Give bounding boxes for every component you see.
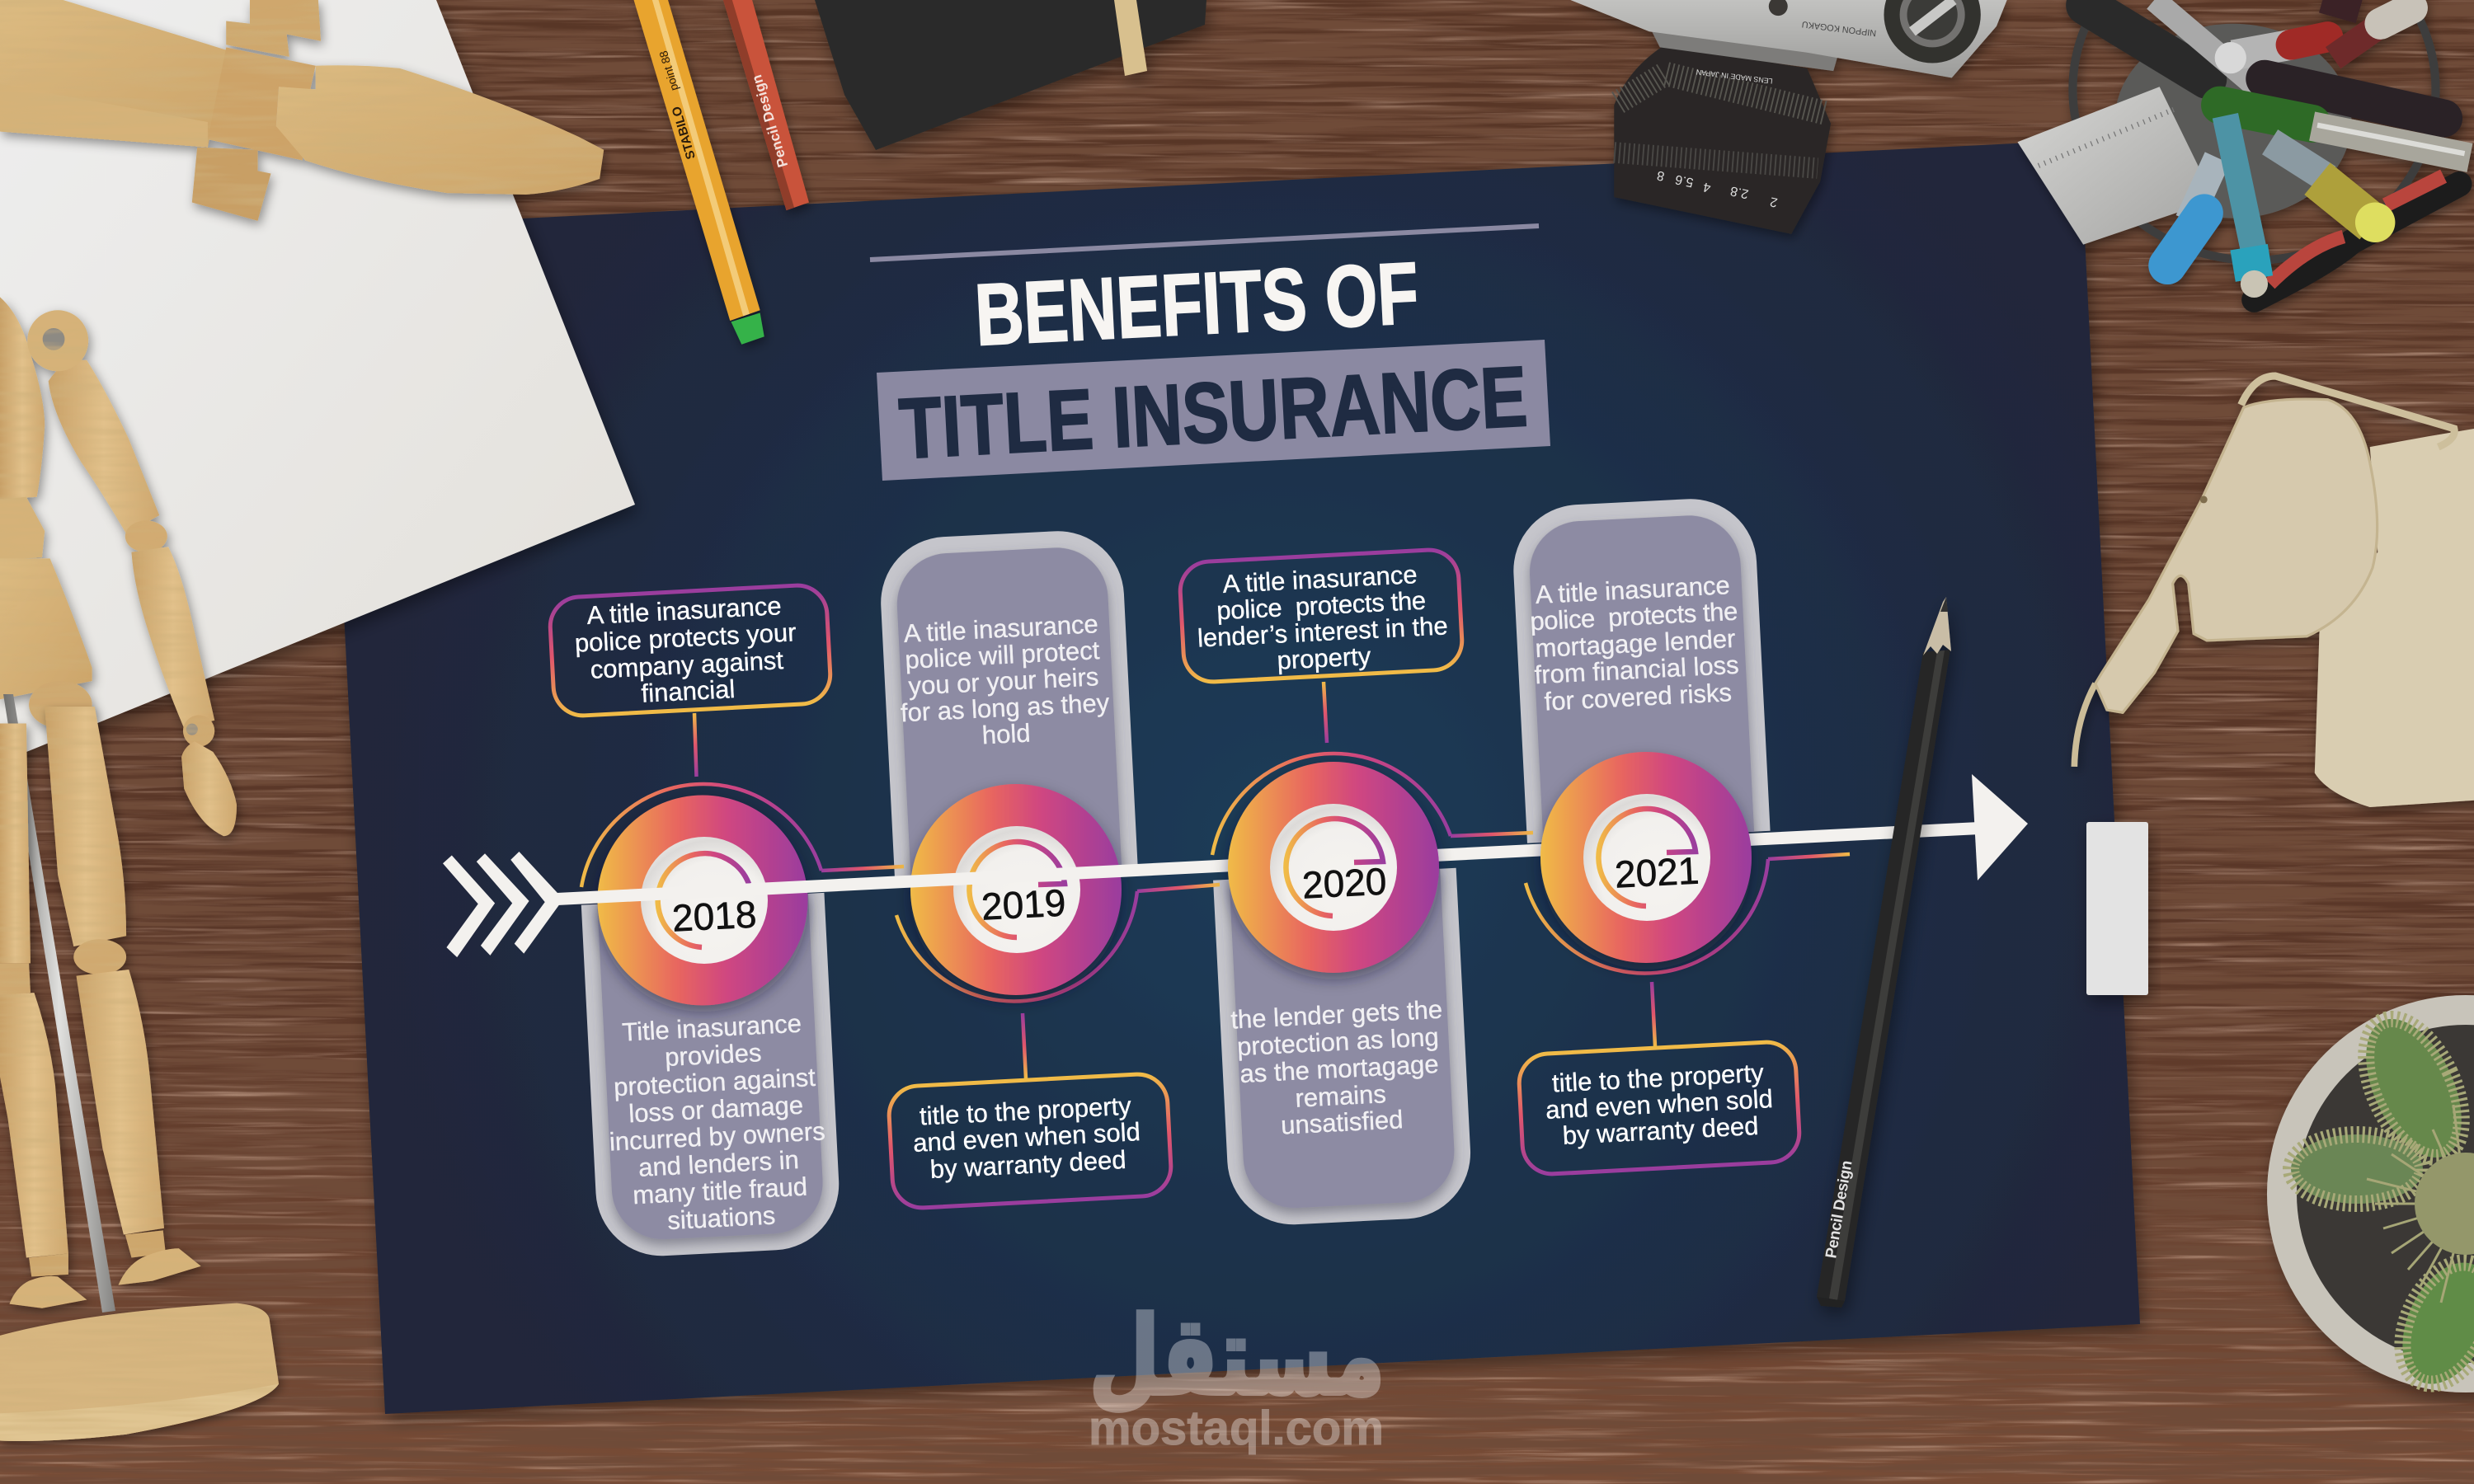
callout: 2019 bbox=[887, 1073, 1173, 1209]
callout: 2021: by warranty deed bbox=[1562, 1111, 1759, 1150]
watermark: mostaql.com bbox=[1089, 1402, 1384, 1455]
text: 2019 top pill: police will protect bbox=[905, 636, 1100, 674]
year node: 2021 bbox=[1540, 752, 1752, 963]
red pencil bbox=[723, 0, 809, 210]
camera: 2.8 bbox=[1729, 183, 1750, 201]
year node: 2020: 2020 bbox=[1301, 859, 1388, 907]
year node: 2018 bbox=[597, 795, 808, 1006]
text: 2020 bottom pill: remains bbox=[1295, 1079, 1387, 1113]
text: 2018 bottom pill bbox=[603, 1008, 830, 1237]
chevrons bbox=[443, 852, 563, 957]
wooden mannequin legs and base bbox=[0, 707, 279, 1441]
year node: 2020 bbox=[1228, 762, 1439, 973]
notebook bbox=[815, 0, 1206, 150]
text: 2018 bottom pill: loss or damage bbox=[628, 1091, 804, 1128]
text: 2021 top pill: A title inasurance bbox=[1535, 571, 1730, 609]
callout: 2021: and even when sold bbox=[1545, 1084, 1774, 1125]
text: 2020 bottom pill: as the mortagage bbox=[1239, 1050, 1439, 1088]
year node: 2019: 2019 bbox=[981, 881, 1067, 928]
text: 2018 bottom pill: and lenders in bbox=[637, 1145, 800, 1182]
callout: 2019: and even when sold bbox=[912, 1117, 1141, 1158]
yellow pen: point 88 bbox=[656, 49, 681, 92]
callout: 2020 bbox=[1178, 548, 1464, 683]
callout: 2018: police protects your bbox=[574, 618, 797, 658]
title: benefits of: BENEFITS OF bbox=[973, 245, 1421, 364]
callout: 2021 bbox=[1517, 1040, 1801, 1176]
year node: 2019 bbox=[910, 784, 1122, 995]
callout: 2018: A title inasurance bbox=[586, 591, 782, 630]
callout: 2018 bbox=[548, 584, 832, 717]
text: 2019 top pill: hold bbox=[981, 718, 1031, 749]
callout: 2020: property bbox=[1277, 641, 1372, 675]
panel: 2021 top pill bbox=[1510, 495, 1771, 843]
watermark bbox=[1089, 1294, 1385, 1455]
arrow head bbox=[1972, 774, 2028, 881]
wooden elephant bbox=[2074, 376, 2474, 807]
text: 2020 bottom pill: protection as long bbox=[1236, 1022, 1439, 1061]
yellow pen bbox=[634, 0, 764, 345]
text: 2021 top pill: from financial loss bbox=[1534, 650, 1739, 689]
camera: 5.6 bbox=[1674, 171, 1695, 190]
mannequin stand rod bbox=[3, 694, 115, 1313]
text: 2018 bottom pill: Title inasurance bbox=[622, 1009, 802, 1047]
camera bbox=[1570, 0, 2007, 234]
text: 2019 top pill: A title inasurance bbox=[903, 609, 1098, 648]
camera: NIPPON KOGAKU bbox=[1801, 19, 1877, 38]
text: 2018 bottom pill: many title fraud bbox=[632, 1172, 808, 1209]
connectors and outer arcs bbox=[581, 682, 1850, 1078]
callout: 2019: title to the property bbox=[919, 1092, 1132, 1131]
text: 2019 top pill: for as long as they bbox=[900, 688, 1110, 727]
callout: 2020: police protects the bbox=[1216, 586, 1427, 625]
callout: 2020: A title inasurance bbox=[1222, 560, 1418, 599]
text: 2020 bottom pill: unsatisfied bbox=[1280, 1105, 1404, 1140]
callout: 2021: title to the property bbox=[1551, 1059, 1765, 1098]
text: 2021 top pill: mortagage lender bbox=[1535, 624, 1736, 663]
title rule bbox=[870, 226, 1539, 260]
wooden mannequin arm bbox=[0, 0, 604, 221]
text: 2021 top pill: police protects the bbox=[1530, 597, 1738, 636]
year node: 2021: 2021 bbox=[1614, 848, 1700, 896]
callout: 2019: by warranty deed bbox=[929, 1145, 1126, 1184]
text: 2020 bottom pill bbox=[1230, 995, 1448, 1142]
year node: 2018: 2018 bbox=[671, 892, 758, 940]
yellow pen: STABILO bbox=[670, 105, 698, 161]
panel: 2019 top pill bbox=[877, 528, 1138, 881]
camera: 2 bbox=[1769, 194, 1779, 209]
callout: 2018: financial bbox=[641, 674, 736, 708]
callout: 2018: company against bbox=[590, 646, 784, 684]
black pencil: Pencil Design bbox=[1823, 1159, 1856, 1260]
pen cup with pens and ruler bbox=[2017, 0, 2470, 300]
white paper sheet bbox=[0, 0, 635, 763]
text: 2021 top pill bbox=[1528, 571, 1743, 716]
title banner: title insurance: TITLE INSURANCE bbox=[897, 349, 1530, 477]
wooden mannequin torso and arm bbox=[0, 297, 237, 836]
text: 2020 bottom pill: the lender gets the bbox=[1230, 995, 1443, 1035]
navy poster sheet bbox=[324, 140, 2140, 1414]
camera: 8 bbox=[1656, 167, 1666, 183]
panel: 2018 bottom pill bbox=[581, 893, 842, 1259]
camera: 4 bbox=[1702, 179, 1712, 195]
camera: LENS MADE IN JAPAN bbox=[1696, 68, 1773, 86]
text: 2019 top pill bbox=[896, 609, 1112, 754]
text: 2018 bottom pill: protection against bbox=[613, 1063, 816, 1101]
text: 2018 bottom pill: situations bbox=[667, 1201, 776, 1235]
cactus pot bbox=[2267, 995, 2474, 1398]
panel: 2020 bottom pill bbox=[1213, 868, 1474, 1228]
eraser bbox=[2086, 822, 2148, 995]
text: 2018 bottom pill: provides bbox=[664, 1038, 762, 1072]
callout: 2020: lender’s interest in the bbox=[1197, 611, 1448, 653]
text: 2019 top pill: you or your heirs bbox=[908, 662, 1099, 701]
text: 2018 bottom pill: incurred by owners bbox=[609, 1116, 825, 1157]
red pencil: Pencil Design bbox=[748, 73, 791, 169]
timeline arrow shaft bbox=[557, 822, 1980, 905]
black pencil bbox=[1817, 597, 1951, 1308]
watermark: مستقل bbox=[1089, 1294, 1385, 1419]
text: 2021 top pill: for covered risks bbox=[1544, 678, 1733, 716]
